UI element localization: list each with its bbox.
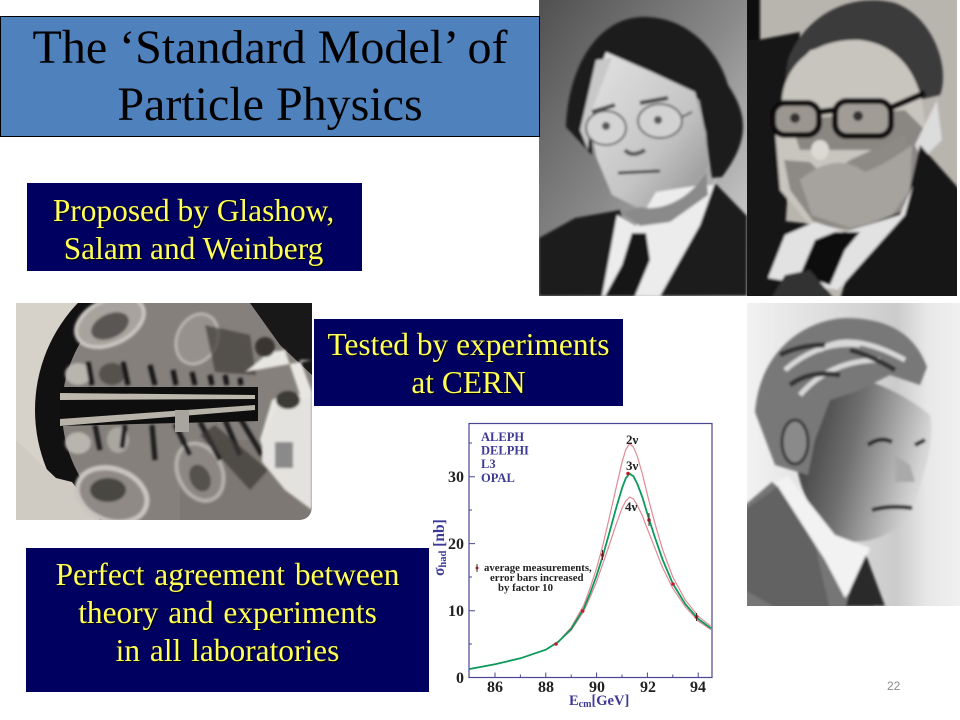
slide number: 22 bbox=[887, 679, 900, 693]
curve labels bbox=[625, 432, 638, 514]
y axis title: σ bbox=[431, 568, 448, 576]
callout: tested by bbox=[314, 319, 623, 406]
x axis numbers bbox=[487, 679, 706, 696]
y axis numbers bbox=[448, 469, 464, 687]
curve: 4 neutrinos bbox=[470, 497, 711, 669]
callout: agreement bbox=[26, 548, 429, 692]
legend note: by factor 10 bbox=[498, 582, 553, 594]
photo: Glashow portrait bbox=[539, 0, 747, 296]
experiment names: OPAL bbox=[481, 471, 515, 485]
x axis numbers: 92 bbox=[640, 679, 656, 696]
title banner: Particle Physics bbox=[117, 78, 423, 131]
curve: 2 neutrinos bbox=[470, 444, 711, 669]
experiment names bbox=[481, 430, 529, 485]
curve labels: 4ν bbox=[625, 499, 638, 514]
callout: proposed by bbox=[27, 183, 362, 271]
curve labels: 2ν bbox=[626, 432, 638, 447]
callout: agreement: in all laboratories bbox=[116, 633, 339, 668]
x axis numbers: 90 bbox=[589, 679, 605, 696]
callout: agreement: Perfect agreement between bbox=[56, 557, 399, 592]
x axis title: E bbox=[569, 693, 579, 709]
legend note: error bars increased bbox=[490, 572, 584, 584]
x axis title: cm bbox=[579, 699, 592, 710]
title banner bbox=[0, 16, 540, 137]
photo: Salam portrait bbox=[745, 0, 960, 300]
photo: Weinberg portrait bbox=[745, 303, 960, 610]
y axis numbers: 0 bbox=[456, 670, 464, 687]
x axis numbers: 88 bbox=[538, 679, 554, 696]
legend note bbox=[484, 562, 592, 594]
callout: proposed by: Salam and Weinberg bbox=[64, 231, 323, 266]
legend note: average measurements, bbox=[484, 562, 592, 574]
y axis title: had bbox=[438, 550, 449, 568]
experiment names: L3 bbox=[481, 457, 496, 471]
curve: 3 neutrinos bbox=[470, 474, 711, 669]
callout: tested by: at CERN bbox=[411, 365, 526, 400]
title banner: The ‘Standard Model’ of bbox=[33, 21, 507, 74]
x axis numbers: 94 bbox=[690, 679, 706, 696]
chart: hadronic cross-section vs energy bbox=[431, 424, 712, 710]
plot frame bbox=[469, 424, 712, 678]
callout: proposed by: Proposed by Glashow, bbox=[53, 193, 334, 228]
callout: tested by: Tested by experiments bbox=[328, 327, 609, 362]
curve labels: 3ν bbox=[626, 458, 638, 473]
x axis title: [GeV] bbox=[591, 693, 629, 709]
x axis numbers: 86 bbox=[487, 679, 503, 696]
y axis numbers: 10 bbox=[448, 603, 464, 620]
callout: agreement: theory and experiments bbox=[78, 595, 377, 630]
photo: CERN accelerator interior bbox=[16, 303, 312, 520]
y axis numbers: 20 bbox=[448, 536, 464, 553]
experiment names: ALEPH bbox=[481, 430, 524, 444]
y axis numbers: 30 bbox=[448, 469, 464, 486]
y axis title: [nb] bbox=[431, 519, 448, 551]
experiment names: DELPHI bbox=[481, 444, 529, 458]
data points bbox=[476, 472, 698, 646]
axis ticks bbox=[469, 443, 698, 678]
